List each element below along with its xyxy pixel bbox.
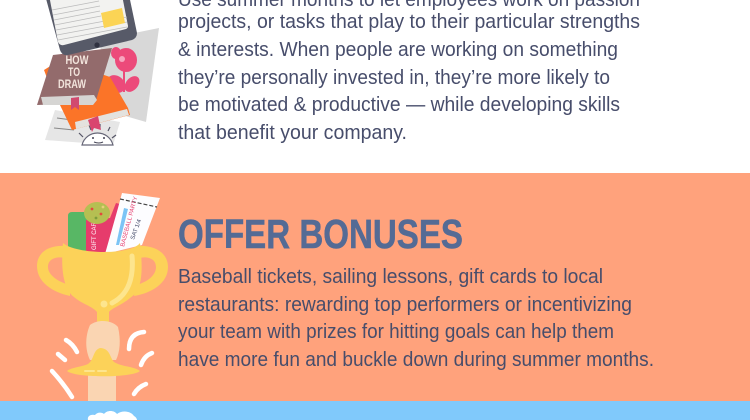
lower paper xyxy=(45,110,120,145)
text: book title: DRAW xyxy=(58,79,86,91)
sun doodle xyxy=(82,133,113,145)
handles xyxy=(37,246,70,296)
motion lines xyxy=(52,332,152,397)
red card xyxy=(86,203,124,254)
icon: books and tablet xyxy=(37,0,159,145)
icon: trophy with prizes xyxy=(37,193,168,401)
text: passion projects body: projects, or tasks that play to their particular strengths xyxy=(178,11,640,33)
grey paper xyxy=(100,28,159,122)
gift card green xyxy=(68,212,88,252)
text: offer bonuses body: your team with prizes for hitting goals can help them xyxy=(178,321,614,343)
ticket xyxy=(105,193,160,254)
text: book title: TO xyxy=(68,67,80,79)
base xyxy=(67,348,140,376)
text: book title xyxy=(58,55,89,91)
burrito xyxy=(84,202,110,224)
text: passion projects body: & interests. When people are working on something xyxy=(178,39,618,61)
panel: offer bonuses xyxy=(0,173,750,401)
text: offer bonuses body: restaurants: rewarding top performers or incentivizing xyxy=(178,294,632,316)
pink flower xyxy=(103,47,142,97)
text: offer bonuses body: have more fun and buckle down during summer months. xyxy=(178,349,654,371)
brown book xyxy=(37,48,112,105)
orange book xyxy=(44,60,130,130)
text: offer bonuses body xyxy=(178,266,654,371)
text: book title: HOW xyxy=(66,55,89,67)
text: passion projects body: be motivated & productive — while developing skills xyxy=(178,94,620,116)
icon: trophy with prizes: GIFT CARD xyxy=(92,217,98,250)
hand xyxy=(86,321,120,360)
icon: cloud xyxy=(88,411,137,420)
tablet xyxy=(45,0,137,55)
heading: offer bonuses: OFFER BONUSES xyxy=(178,211,463,257)
icon: trophy with prizes: SAT 1/4 xyxy=(130,218,143,241)
text: passion projects body xyxy=(178,0,640,144)
panel: next section (blue) xyxy=(0,401,750,420)
text: offer bonuses body: Baseball tickets, sailing lessons, gift cards to local xyxy=(178,266,603,288)
text: passion projects body: they’re personally invested in, they’re more likely to xyxy=(178,67,610,89)
arm xyxy=(88,374,116,401)
icon: trophy with prizes: BASEBALL PARTY xyxy=(120,196,139,248)
text: passion projects body: that benefit your company. xyxy=(178,122,407,144)
cup xyxy=(62,243,142,312)
